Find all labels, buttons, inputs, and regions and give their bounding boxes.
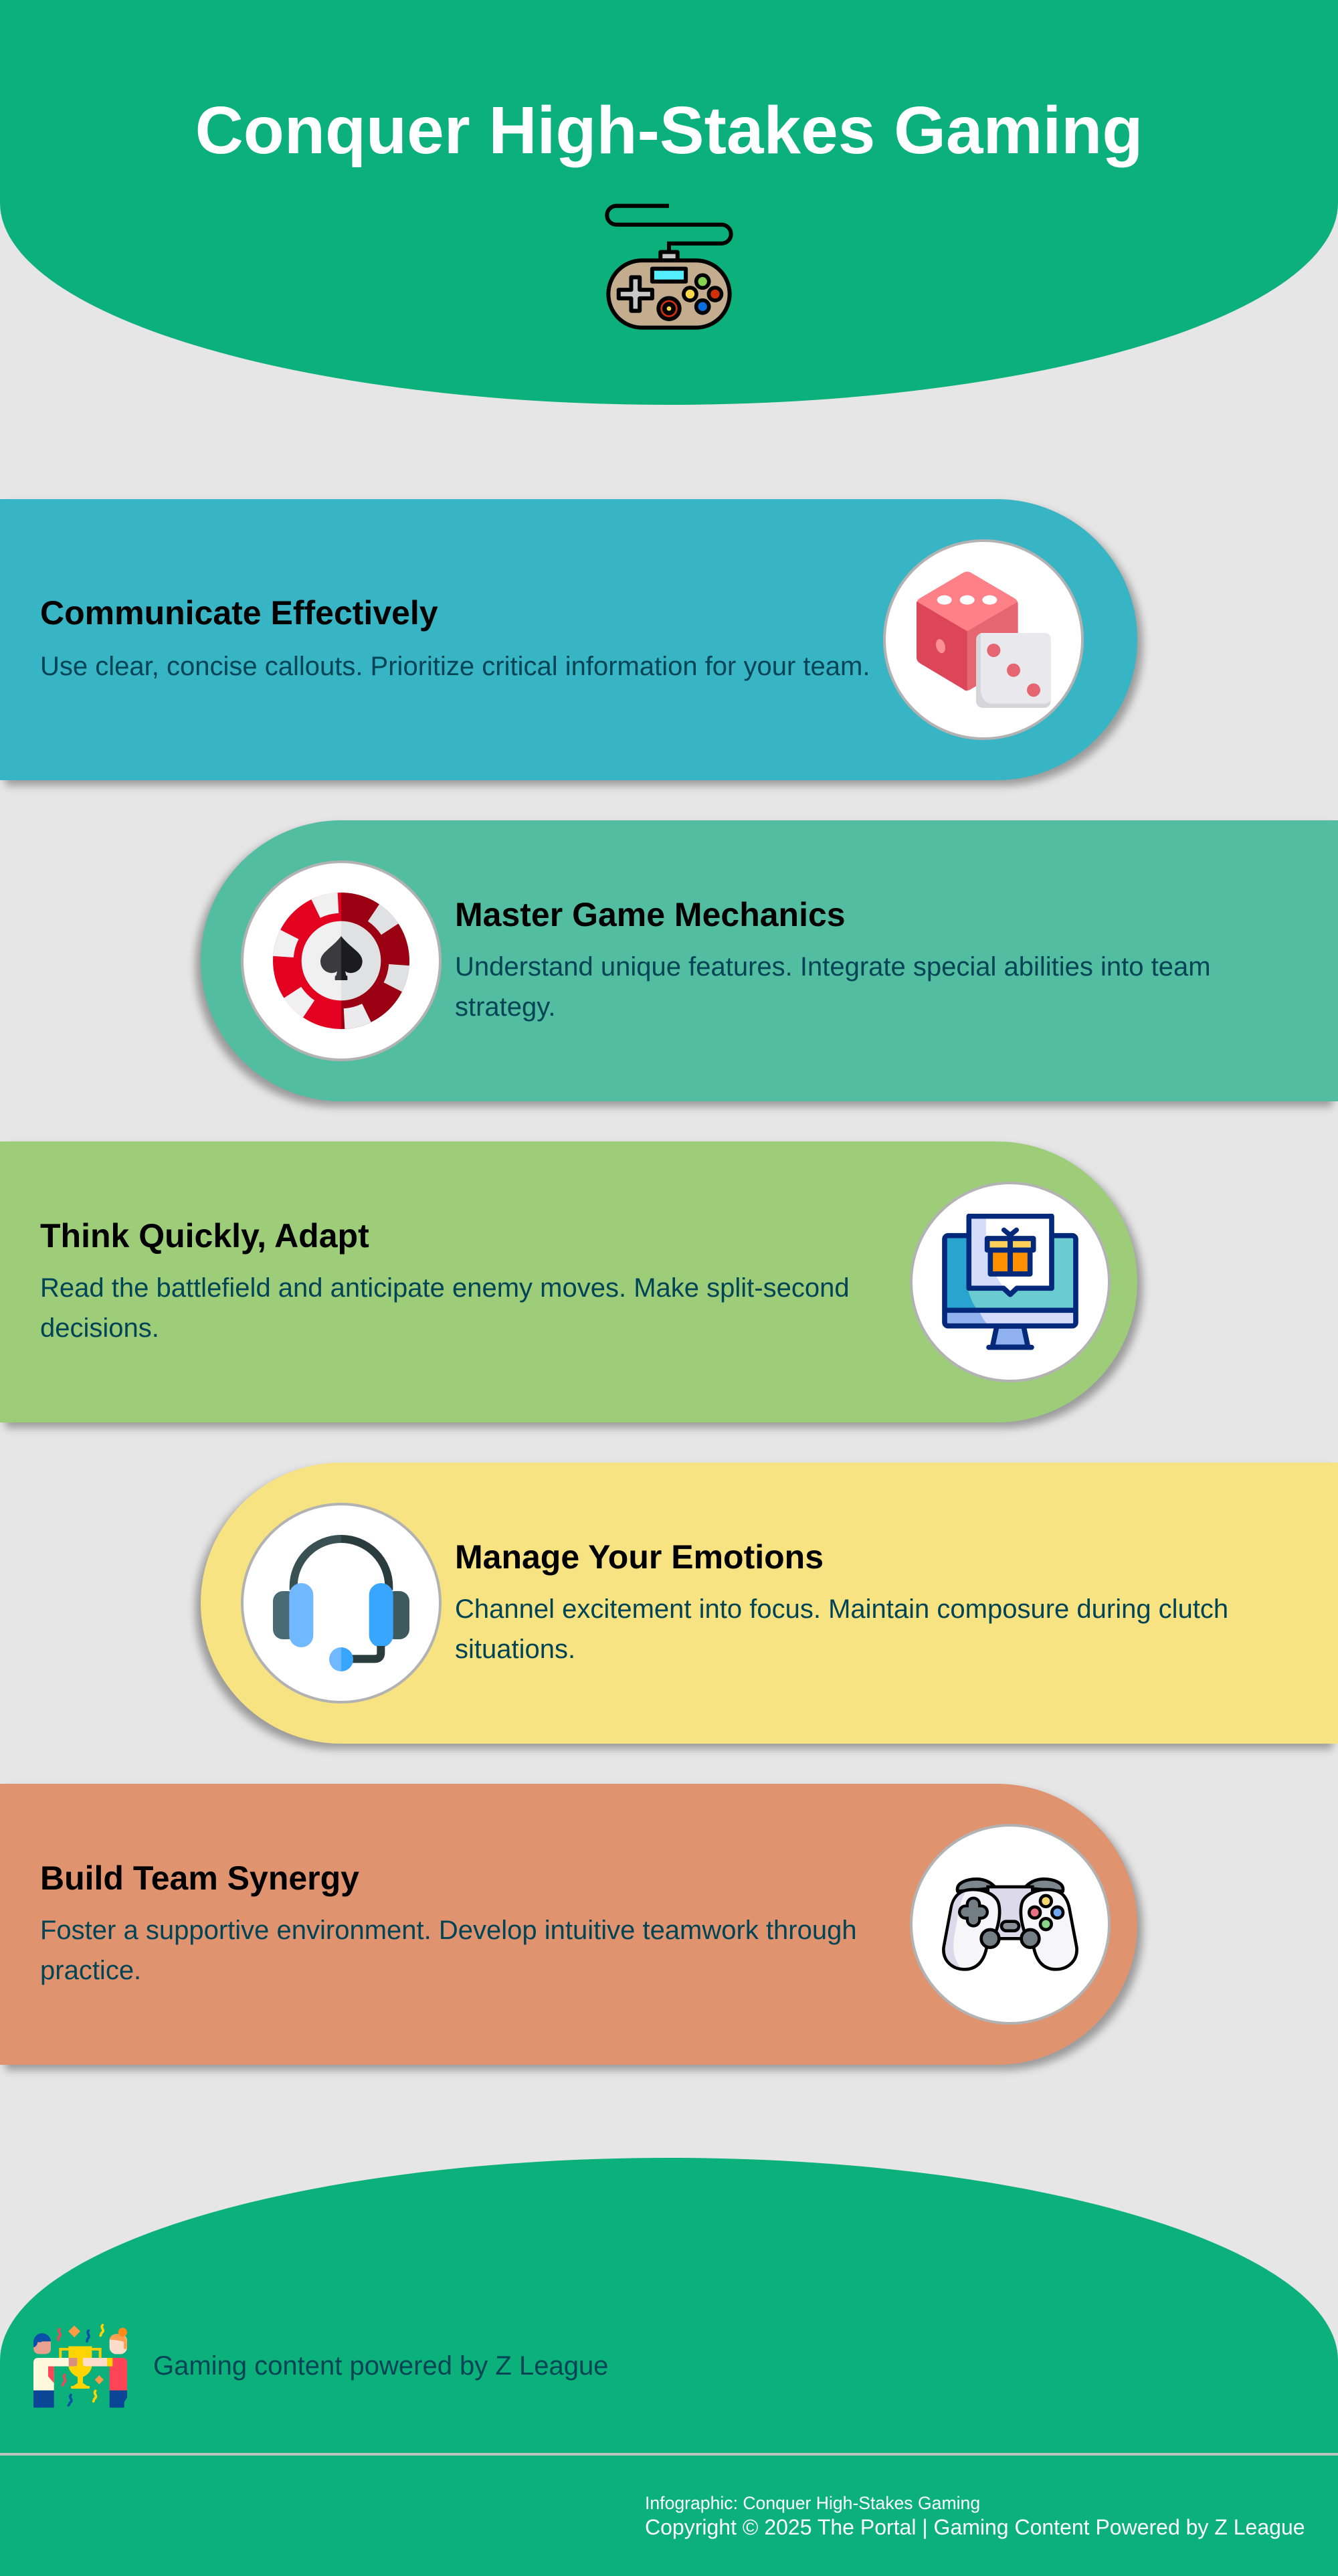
text block: Foster a supportive environment. Develop intuitive teamwork through xyxy=(40,1916,857,1945)
icon circle: poker chip xyxy=(241,860,442,1061)
text block: decisions. xyxy=(40,1313,159,1343)
panel: think quickly, adapt xyxy=(0,1141,1137,1422)
heading: Think Quickly, Adapt xyxy=(40,1217,369,1255)
text block xyxy=(455,952,1211,1022)
text block: Read the battlefield and anticipate enemy moves. Make split-second xyxy=(40,1273,850,1303)
footer panel xyxy=(0,2158,1338,2576)
heading: Manage Your Emotions xyxy=(455,1538,824,1576)
icon: monitor with gift xyxy=(942,1214,1078,1350)
text block: situations. xyxy=(455,1635,575,1664)
panel: manage your emotions xyxy=(201,1463,1338,1744)
panel: build team synergy xyxy=(0,1784,1137,2065)
icon: wired game controller xyxy=(605,203,733,330)
icon circle: dice xyxy=(883,539,1084,740)
text block: Channel excitement into focus. Maintain composure during clutch xyxy=(455,1594,1228,1624)
icon: dice xyxy=(917,571,1051,708)
icon: poker chip xyxy=(273,893,409,1029)
icon circle: gamepad xyxy=(910,1824,1111,2025)
icon circle: monitor with gift xyxy=(910,1182,1111,1382)
text block: Understand unique features. Integrate special abilities into team xyxy=(455,952,1211,982)
icon: gamepad xyxy=(942,1877,1078,1971)
title: Conquer High-Stakes Gaming xyxy=(195,93,1143,168)
heading: Master Game Mechanics xyxy=(455,896,846,933)
header banner xyxy=(0,0,1338,405)
text block xyxy=(455,1594,1228,1664)
panel: master game mechanics xyxy=(201,820,1338,1101)
icon: headset xyxy=(273,1535,409,1671)
text block: Use clear, concise callouts. Prioritize critical information for your team. xyxy=(40,652,870,681)
heading: Communicate Effectively xyxy=(40,594,438,632)
copyright: Copyright © 2025 The Portal | Gaming Content Powered by Z League xyxy=(645,2515,1305,2539)
sponsor text: Gaming content powered by Z League xyxy=(153,2351,608,2381)
icon: team with trophy xyxy=(33,2324,127,2407)
text block xyxy=(40,1916,857,1985)
heading: Build Team Synergy xyxy=(40,1859,359,1897)
icon circle: headset xyxy=(241,1503,442,1704)
panel: communicate effectively xyxy=(0,499,1137,780)
text block xyxy=(40,1273,850,1343)
text block: strategy. xyxy=(455,992,555,1022)
text block: practice. xyxy=(40,1956,141,1985)
footer caption: Infographic: Conquer High-Stakes Gaming xyxy=(645,2493,980,2513)
